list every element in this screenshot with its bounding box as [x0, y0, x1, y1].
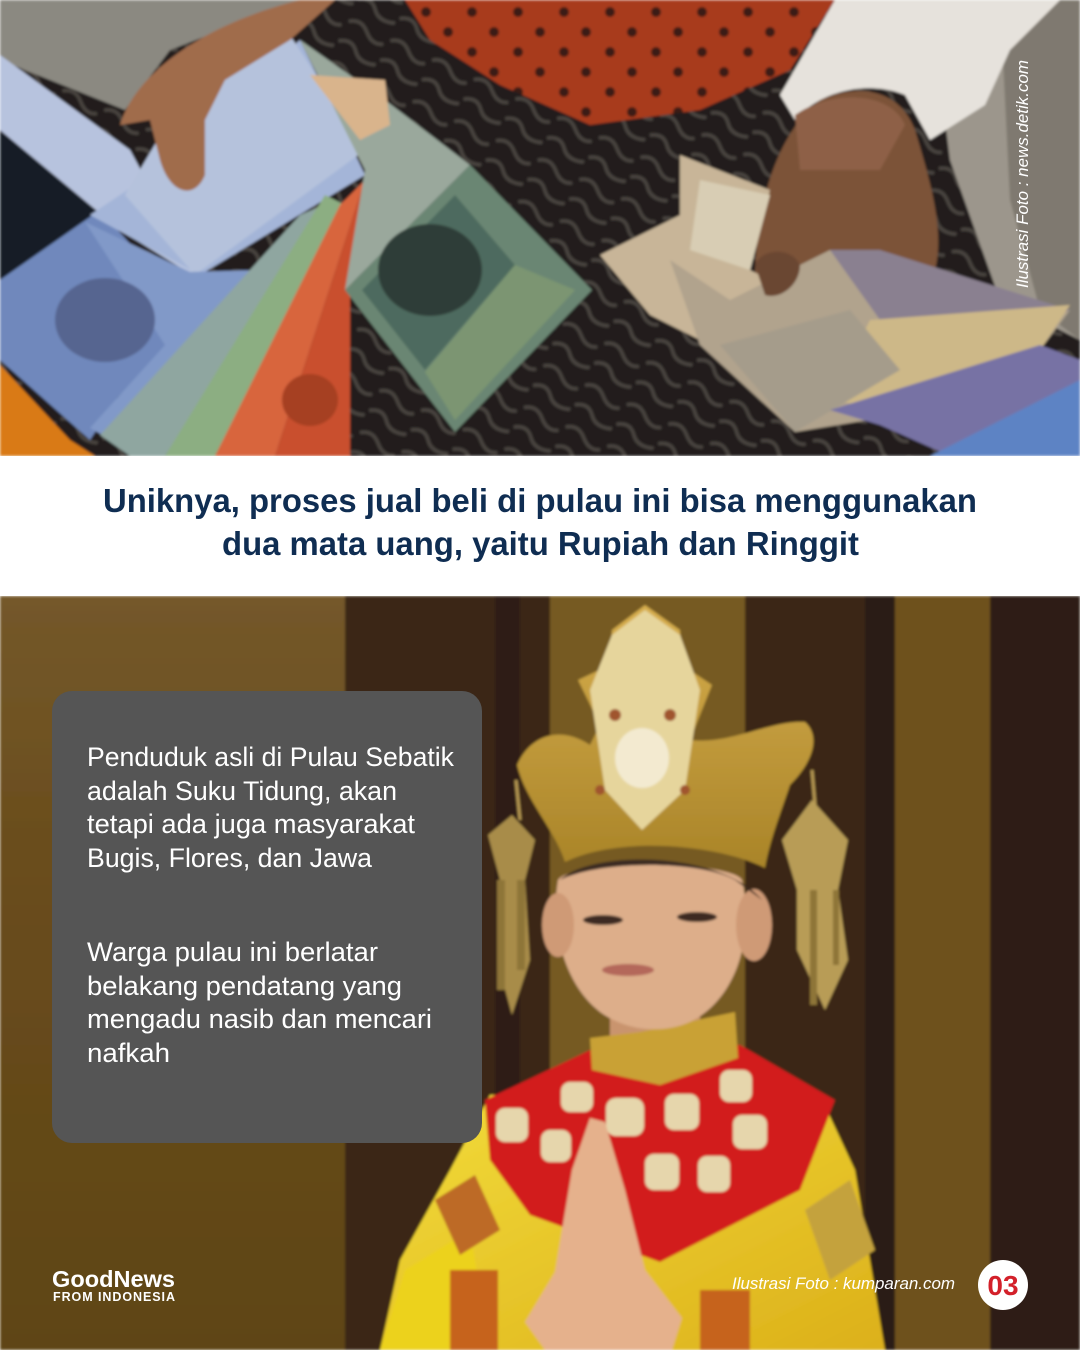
praying hands [525, 1118, 682, 1350]
paragraph: migrant residents: Warga pulau ini berlatar [87, 937, 378, 967]
photo credit: kumparan: Ilustrasi Foto : kumparan.com [732, 1274, 955, 1293]
photo: child in traditional Tidung costume [0, 596, 1080, 1350]
paragraph: migrant residents: mengadu nasib dan mencari [87, 1004, 432, 1034]
rupiah notes [598, 153, 772, 340]
paragraph: migrant residents [87, 937, 432, 1068]
paragraph: indigenous inhabitants: tetapi ada juga masyarakat [87, 809, 415, 839]
photo credit: detik: Ilustrasi Foto : news.detik.com [1013, 60, 1032, 288]
paragraph: migrant residents: nafkah [87, 1038, 170, 1068]
vest motifs [496, 1070, 767, 1192]
paragraph: indigenous inhabitants: Bugis, Flores, dan Jawa [87, 843, 373, 873]
paragraph: migrant residents: belakang pendatang yang [87, 971, 402, 1001]
crown tassels [488, 770, 848, 1015]
logo: GoodNews from Indonesia: GoodNews [52, 1266, 175, 1292]
heading: dua mata uang, yaitu Rupiah dan Ringgit [222, 525, 859, 562]
right sleeve [780, 0, 1060, 140]
paragraph: indigenous inhabitants: Penduduk asli di Pulau Sebatik [87, 742, 454, 772]
left hand [120, 0, 335, 191]
heading: Uniknya, proses jual beli di pulau ini bisa menggunakan [103, 482, 977, 519]
left sleeve background [0, 0, 300, 110]
crown [517, 605, 813, 868]
logo: GoodNews from Indonesia: FROM INDONESIA [53, 1290, 175, 1304]
right background [944, 65, 1080, 341]
red dotted dress [405, 0, 835, 125]
white heading band [0, 456, 1080, 596]
photo: hands holding ringgit and rupiah banknotes [0, 0, 1080, 456]
left banknote fan: blue [0, 55, 200, 280]
logo: GoodNews from Indonesia [52, 1266, 175, 1304]
paragraph: indigenous inhabitants [87, 742, 454, 873]
page number badge [978, 1260, 1028, 1310]
red vest [485, 1045, 835, 1262]
face [556, 865, 746, 1029]
yellow costume body [380, 1095, 885, 1350]
neck and gold collar [608, 1016, 702, 1037]
heading [103, 482, 977, 562]
paragraph: indigenous inhabitants: adalah Suku Tidung, akan [87, 776, 397, 806]
page number badge: 03 [987, 1270, 1019, 1301]
green 50 ringgit [345, 165, 592, 432]
info card [52, 691, 482, 1143]
right hand [755, 91, 938, 295]
